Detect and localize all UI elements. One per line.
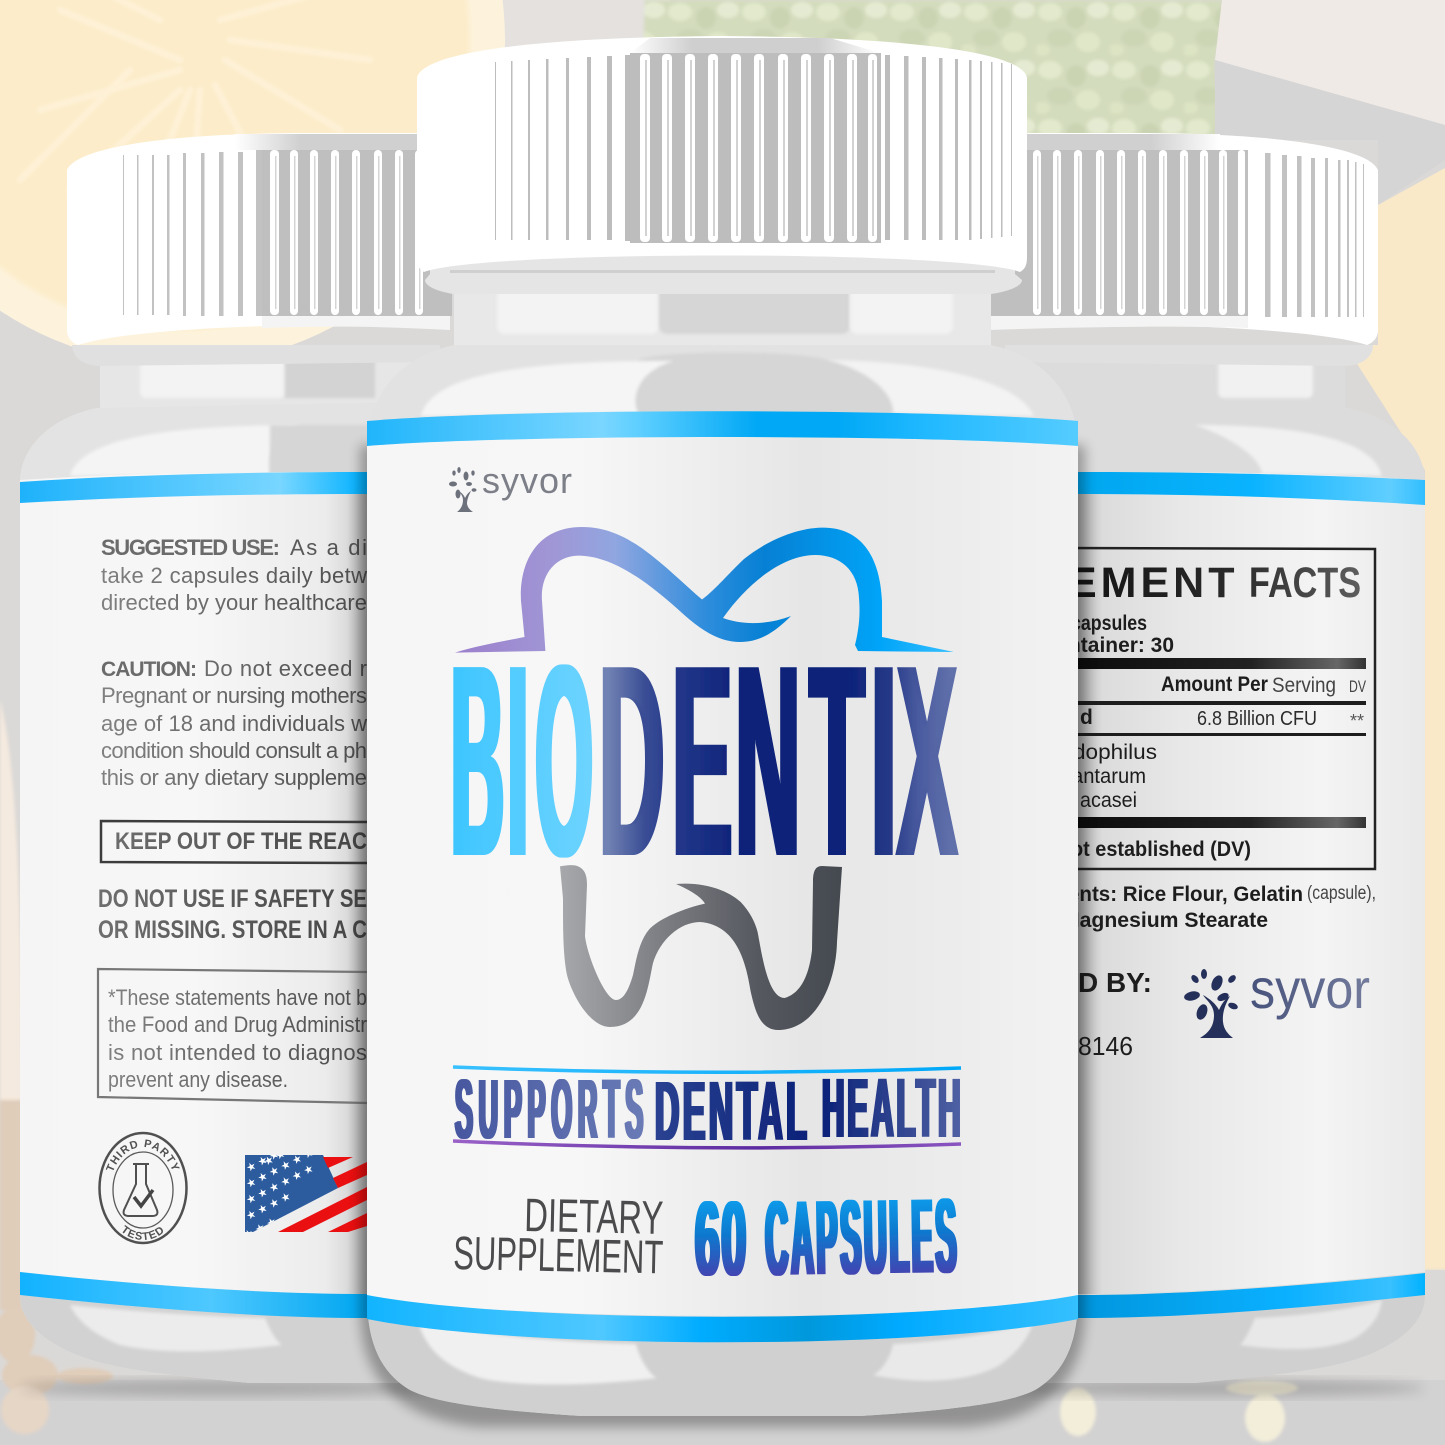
center blue band top (367, 411, 1078, 446)
dietary supplement text: SUPPLEMENT (453, 1226, 664, 1283)
capsule count: 60 (695, 1180, 748, 1298)
center blue band bottom (367, 1295, 1078, 1342)
center base (367, 1297, 1078, 1416)
distributed by text (1078, 967, 1152, 1061)
icon: american flag: ★★★ (242, 1214, 282, 1242)
supplement facts panel: ntainer: 30 (1068, 634, 1174, 657)
capsule count: CAPSULES (764, 1176, 960, 1298)
product name: BIO (451, 609, 593, 914)
left bottle blue bands (20, 472, 367, 1318)
icon: small tree (449, 467, 476, 512)
safety warning text (98, 885, 367, 944)
supplement facts panel: d (1080, 706, 1093, 729)
icon: american flag: ★★★★ (262, 1135, 313, 1169)
orange slice (0, 0, 505, 365)
caution text (101, 656, 367, 790)
icon: american flag: ★★★★★★★★ (233, 1139, 330, 1197)
center bottle: front label (360, 36, 1085, 1427)
supplement facts panel: ot established (DV) (1071, 838, 1251, 861)
caution text: Pregnant or nursing mothers (101, 683, 367, 708)
suggested use text (101, 535, 367, 615)
supplement facts panel (1060, 548, 1375, 869)
center shoulder highlights (421, 352, 1034, 416)
FDA disclaimer box: prevent any disease. (108, 1067, 288, 1092)
icon: third party tested seal: TESTED (122, 1225, 163, 1240)
supplement facts panel: ** (1350, 711, 1364, 731)
caution text: condition should consult a ph (101, 738, 367, 763)
supplement facts panel: EMENT (1068, 559, 1238, 607)
syvor logo large: syvor (1250, 957, 1370, 1020)
suggested use text: directed by your healthcare (101, 590, 367, 615)
center cap (417, 36, 1027, 272)
dietary supplement text: DIETARY (524, 1188, 664, 1244)
center bottle side shadow (360, 445, 1085, 1427)
caution text: CAUTION: (101, 658, 197, 681)
cheese wedge (1345, 168, 1445, 1270)
suggested use text: take 2 capsules daily betw (101, 563, 367, 588)
tooth icon top (455, 527, 954, 653)
right bottle: supplement facts (990, 133, 1425, 1396)
FDA disclaimer box: *These statements have not b (108, 985, 367, 1010)
syvor logo small: syvor (482, 460, 572, 501)
FDA disclaimer box: is not intended to diagnos (108, 1040, 367, 1065)
distributed by text: 8146 (1078, 1031, 1133, 1061)
tagline: DENTAL (655, 1064, 810, 1158)
icon: american flag: ★★★★★★★ (233, 1161, 319, 1213)
FDA disclaimer box: the Food and Drug Administr (108, 1012, 367, 1037)
icon: tree (1183, 969, 1239, 1038)
beans left (0, 700, 113, 1434)
broccoli (640, 0, 1222, 140)
right bottle cap (990, 133, 1378, 345)
caution text: this or any dietary suppleme (101, 765, 367, 790)
icon: american flag: ★★★★★ (233, 1189, 296, 1229)
caution text: age of 18 and individuals w (101, 711, 367, 736)
icon: american flag (245, 1155, 367, 1232)
keep out of reach box: KEEP OUT OF THE REAC (115, 828, 367, 855)
tagline: SUPPORTS (455, 1064, 649, 1157)
safety warning text: OR MISSING. STORE IN A C (98, 916, 367, 944)
distributed by text: D BY: (1078, 967, 1152, 998)
tagline: HEALTH (822, 1063, 963, 1156)
suggested use text: As a di (290, 535, 367, 560)
tagline (453, 1063, 963, 1158)
keep out of reach box (101, 821, 367, 863)
right bottle body (1005, 345, 1425, 1396)
other ingredients text: ents: Rice Flour, Gelatin (1068, 883, 1303, 906)
other ingredients text: (capsule), (1307, 883, 1376, 904)
supplement facts panel: Serving (1272, 674, 1336, 697)
right bottle blue bands (1078, 472, 1425, 1318)
supplement facts panel: capsules (1071, 612, 1147, 635)
caution text: Do not exceed r (204, 656, 367, 681)
product name: DENTIX (599, 609, 957, 914)
supplement facts panel: DV (1349, 677, 1366, 696)
center bottle neck (425, 255, 1022, 355)
suggested use text: SUGGESTED USE: (101, 535, 280, 560)
icon: third party tested seal (98, 1132, 188, 1244)
center bottle body (367, 345, 1078, 1416)
FDA disclaimer box (98, 969, 367, 1103)
supplement facts panel: idophilus (1068, 741, 1157, 764)
left bottle: back label (20, 133, 492, 1408)
left bottle body (20, 345, 440, 1396)
supplement facts panel: FACTS (1249, 559, 1361, 607)
icon: american flag: ★★★★★★★★ (233, 1123, 330, 1181)
left bottle cap (67, 133, 452, 345)
dietary supplement text (453, 1188, 664, 1283)
supplement facts panel: 6.8 Billion CFU (1197, 708, 1317, 730)
syvor logo small (449, 460, 572, 512)
supplement facts panel: Amount Per (1161, 673, 1268, 696)
supplement facts panel: acasei (1080, 789, 1137, 812)
other ingredients text (1062, 883, 1376, 932)
petals bottom right (1060, 1270, 1445, 1442)
tooth icon bottom (560, 865, 842, 1030)
other ingredients text: Magnesium Stearate (1062, 909, 1268, 932)
supplement facts panel: antarum (1072, 765, 1146, 788)
safety warning text: DO NOT USE IF SAFETY SE (98, 885, 367, 913)
center label (367, 437, 1078, 1316)
wall and shadow band (1215, 0, 1445, 125)
icon: third party tested seal: THIRD PARTY (106, 1139, 180, 1170)
syvor logo large (1183, 957, 1370, 1038)
